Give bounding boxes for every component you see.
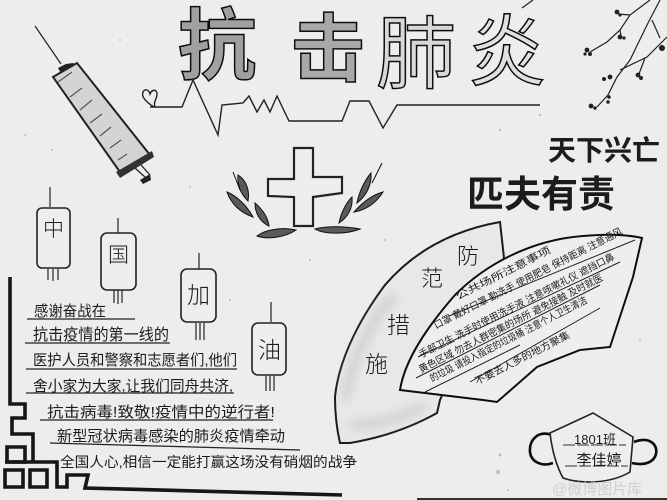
lantern: 加 — [181, 253, 216, 340]
icon: face mask with name: 李佳婷 — [576, 452, 622, 469]
icon: laurel branches — [227, 163, 383, 238]
message text block: 抗击病毒!致敬!疫情中的逆行者! — [47, 404, 275, 421]
message text block: 抗击疫情的第一线的 — [33, 326, 169, 344]
heartbeat line with heart — [143, 80, 540, 135]
icon: cross — [268, 148, 342, 226]
message text block — [25, 303, 357, 470]
lantern: 油 — [252, 302, 286, 391]
icon: syringe — [35, 26, 154, 184]
icon: face mask with name — [530, 413, 656, 482]
slogan: 匹夫有责 — [467, 174, 615, 215]
lantern: 加: 加 — [187, 282, 210, 308]
fan back leaf: 防 — [457, 244, 479, 269]
lantern: 油: 油 — [258, 337, 281, 363]
fan back leaf: 施 — [365, 351, 388, 377]
fan front leaf with notes: 公共场所注意事项 — [453, 243, 553, 303]
lantern: 中: 中 — [43, 218, 64, 241]
title: 击 — [291, 8, 365, 91]
title: 抗 — [178, 2, 256, 90]
fan front leaf with notes: 手部卫生 洗手时使用洗手液 注意咳嗽礼仪 遮挡口鼻 — [416, 250, 617, 361]
fan front leaf with notes — [400, 225, 642, 402]
message text block: 医护人员和警察和志愿者们,他们 — [33, 351, 237, 369]
fan front leaf with notes: 黄色区域 勿去人群密集的场所 避免接触 及时就医 — [416, 271, 605, 376]
lantern: 国: 国 — [108, 244, 129, 267]
icon: blossom branch — [522, 0, 667, 110]
fan back leaf — [335, 222, 504, 443]
watermark: @微博图片库 — [552, 481, 642, 498]
message text block: 舍小家为大家,让我们同舟共济, — [33, 378, 233, 395]
lantern: 中 — [37, 187, 70, 281]
panel: fan prevention measures — [335, 222, 642, 443]
message text block: 感谢奋战在 — [34, 303, 106, 320]
corner border — [5, 277, 342, 495]
fan front leaf with notes: 不要去人多的地方聚集 — [472, 328, 572, 388]
slogan: 天下兴亡 — [548, 135, 660, 166]
message text block: 新型冠状病毒感染的肺炎疫情牵动 — [57, 428, 285, 445]
message text block: 全国人心,相信一定能打赢这场没有硝烟的战争 — [60, 454, 357, 470]
icon: face mask with name: 1801班 — [574, 432, 616, 447]
fan back leaf: 措 — [387, 312, 410, 338]
slogan — [467, 135, 660, 215]
fan front leaf with notes: 的垃圾 请投入指定的垃圾桶 注意个人卫生清洁 — [427, 294, 589, 385]
fan back leaf: 范 — [421, 266, 443, 291]
title — [178, 2, 546, 99]
title: 肺 — [376, 10, 456, 99]
title: 炎 — [468, 8, 546, 96]
lantern: 国 — [101, 218, 136, 304]
fan front leaf with notes: 口罩 戴好口罩 勤洗手 使用肥皂 保持距离 注意通风 — [431, 225, 624, 332]
